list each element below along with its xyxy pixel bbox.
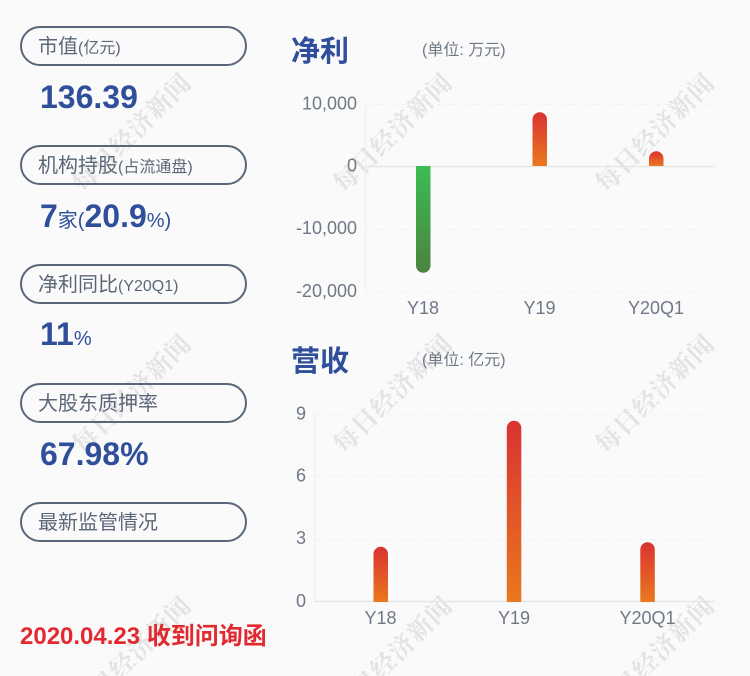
panel: institutional holdings [21, 146, 246, 234]
label pill: regulatory status [21, 503, 246, 541]
watermarks: 每日经济新闻 [328, 329, 458, 459]
unit: net profit: (单位: 万元) [422, 41, 506, 59]
callout: inquiry letter date: 2020.04.23 收到问询函 [20, 623, 267, 650]
label pill: regulatory status: 最新监管情况 [38, 511, 158, 534]
y axis labels: 0 [347, 156, 357, 176]
y axis labels: -10,000 [296, 218, 357, 238]
y axis labels [296, 404, 306, 611]
label pill: net profit growth [21, 265, 246, 303]
panel: net profit growth [21, 265, 246, 352]
watermarks: 每日经济新闻 [67, 329, 197, 459]
x axis labels [364, 608, 676, 628]
label pill: market cap: 市值(亿元) [38, 35, 121, 58]
y axis labels: 6 [296, 466, 306, 486]
x axis labels: Y18 [364, 608, 397, 628]
x axis labels: Y19 [523, 298, 556, 318]
value: pledge ratio: 67.98% [40, 436, 149, 472]
x axis labels: Y20Q1 [619, 608, 676, 628]
unit: revenue: (单位: 亿元) [422, 351, 506, 369]
y axis labels: 0 [296, 591, 306, 611]
heading: revenue: 营收 [291, 345, 349, 378]
value: market cap: 136.39 [40, 79, 138, 115]
label pill: pledge ratio [21, 384, 246, 422]
label pill: pledge ratio: 大股东质押率 [38, 392, 158, 415]
watermarks: 每日经济新闻 [590, 68, 720, 198]
bar: Y19 [507, 421, 521, 602]
y axis labels: 3 [296, 528, 306, 548]
chart: net profit [296, 94, 715, 318]
x axis labels: Y18 [407, 298, 439, 318]
label pill: institutional holdings [21, 146, 246, 184]
panel: pledge ratio [21, 384, 246, 472]
chart: revenue [296, 404, 715, 628]
x axis labels: Y19 [498, 608, 530, 628]
bar: Y19 [532, 112, 547, 166]
label pill: net profit growth: 净利同比(Y20Q1) [38, 273, 178, 296]
bar: Y20Q1 [640, 542, 655, 602]
heading: net profit: 净利 [291, 35, 349, 68]
value: institutional holdings: 7家(20.9%) [40, 198, 171, 234]
y axis labels: 9 [296, 404, 306, 424]
y axis labels [296, 94, 357, 301]
y axis labels: 10,000 [302, 94, 357, 114]
watermarks: 每日经济新闻 [590, 329, 720, 459]
label pill: market cap [21, 27, 246, 65]
label pill: institutional holdings: 机构持股(占流通盘) [38, 154, 193, 177]
panel: market cap [21, 27, 246, 115]
bar: Y18 [374, 547, 388, 602]
x axis labels: Y20Q1 [628, 298, 684, 318]
bar: Y20Q1 [649, 151, 664, 166]
watermarks [67, 68, 720, 676]
watermarks: 每日经济新闻 [67, 68, 197, 198]
watermarks: 每日经济新闻 [328, 68, 458, 198]
y axis labels: -20,000 [296, 281, 357, 301]
bar: Y18 [416, 166, 430, 273]
x axis labels [407, 298, 684, 318]
value: net profit growth: 11% [40, 316, 92, 352]
